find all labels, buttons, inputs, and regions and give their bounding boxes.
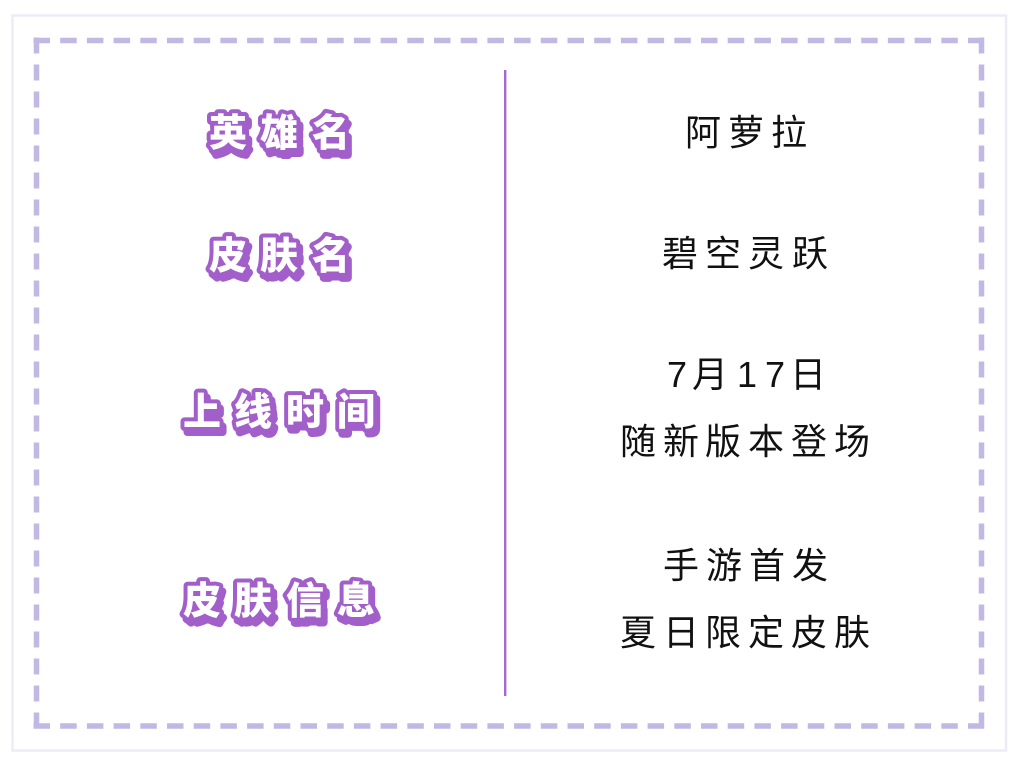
vertical divider (504, 70, 506, 696)
heading: hero name: 英雄名 (209, 113, 350, 155)
value: hero name: 阿萝拉 (685, 112, 807, 153)
heading: skin name: 皮肤名 (209, 236, 350, 278)
value: skin name: 碧空灵跃 (662, 233, 828, 274)
heading: release time: 上线时间 (183, 392, 375, 434)
first release platform: 手游首发 (663, 545, 828, 586)
value: release time (620, 354, 870, 462)
limited skin note: 夏日限定皮肤 (620, 612, 870, 653)
release date: 7月17日 (667, 354, 826, 395)
heading: skin info: 皮肤信息 (183, 581, 375, 623)
release note: 随新版本登场 (620, 421, 870, 462)
value: skin info (620, 545, 870, 653)
